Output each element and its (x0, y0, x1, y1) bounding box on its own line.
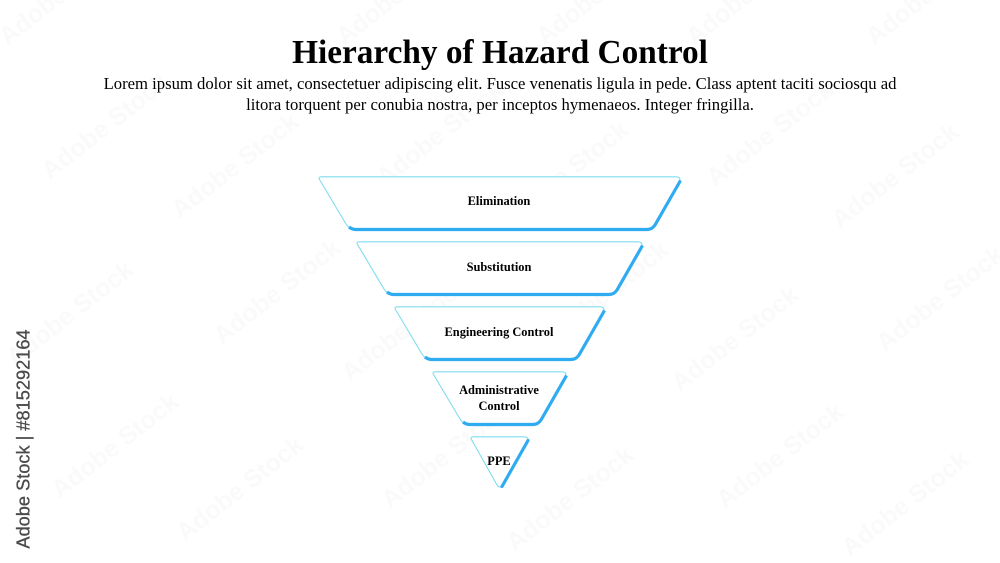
tier: Elimination: Elimination (468, 194, 530, 208)
background watermark pattern: Adobe Stock (666, 281, 804, 397)
tier: Engineering Control: Engineering Control (445, 325, 554, 339)
title: Hierarchy of Hazard Control (292, 34, 708, 71)
tier: Administrative Control: Control (478, 399, 520, 413)
tier: Substitution (357, 242, 642, 294)
background watermark pattern: Adobe Stock (336, 271, 474, 387)
background watermark pattern: Adobe Stock (371, 76, 509, 192)
intro text block: litora torquent per conubia nostra, per inceptos hymenaeos. Integer fringilla. (246, 95, 754, 114)
background watermark pattern: Adobe Stock (166, 108, 304, 224)
background watermark pattern: Adobe Stock (826, 118, 964, 234)
stock credit: Adobe Stock | #815292164 (13, 329, 33, 549)
background watermark pattern: Adobe Stock (836, 446, 974, 562)
background watermark pattern: Adobe Stock (171, 431, 309, 547)
background watermark pattern: Adobe Stock (536, 236, 674, 352)
background watermark pattern: Adobe Stock (46, 388, 184, 504)
tier: Elimination (319, 177, 680, 230)
tier: PPE: PPE (487, 454, 511, 468)
background watermark pattern: Adobe Stock (496, 116, 634, 232)
background watermark pattern: Adobe Stock (711, 398, 849, 514)
background watermark pattern: Adobe Stock (501, 441, 639, 557)
intro text block: Lorem ipsum dolor sit amet, consectetuer adipiscing elit. Fusce venenatis ligula in pede. Class aptent taciti sociosqu ad (104, 74, 896, 93)
background watermark pattern: Adobe Stock (208, 234, 346, 350)
background watermark pattern: Adobe Stock (376, 398, 514, 514)
tier: Administrative Control (433, 372, 566, 424)
background watermark pattern: Adobe Stock (701, 76, 839, 192)
tier: Substitution: Substitution (467, 260, 531, 274)
background watermark pattern: Adobe Stock (36, 69, 174, 185)
intro text block (104, 74, 896, 114)
tier: Administrative Control: Administrative (459, 383, 539, 397)
tier: Engineering Control (395, 307, 604, 360)
tier: PPE (471, 437, 528, 487)
background watermark pattern: Adobe Stock (1, 256, 139, 372)
